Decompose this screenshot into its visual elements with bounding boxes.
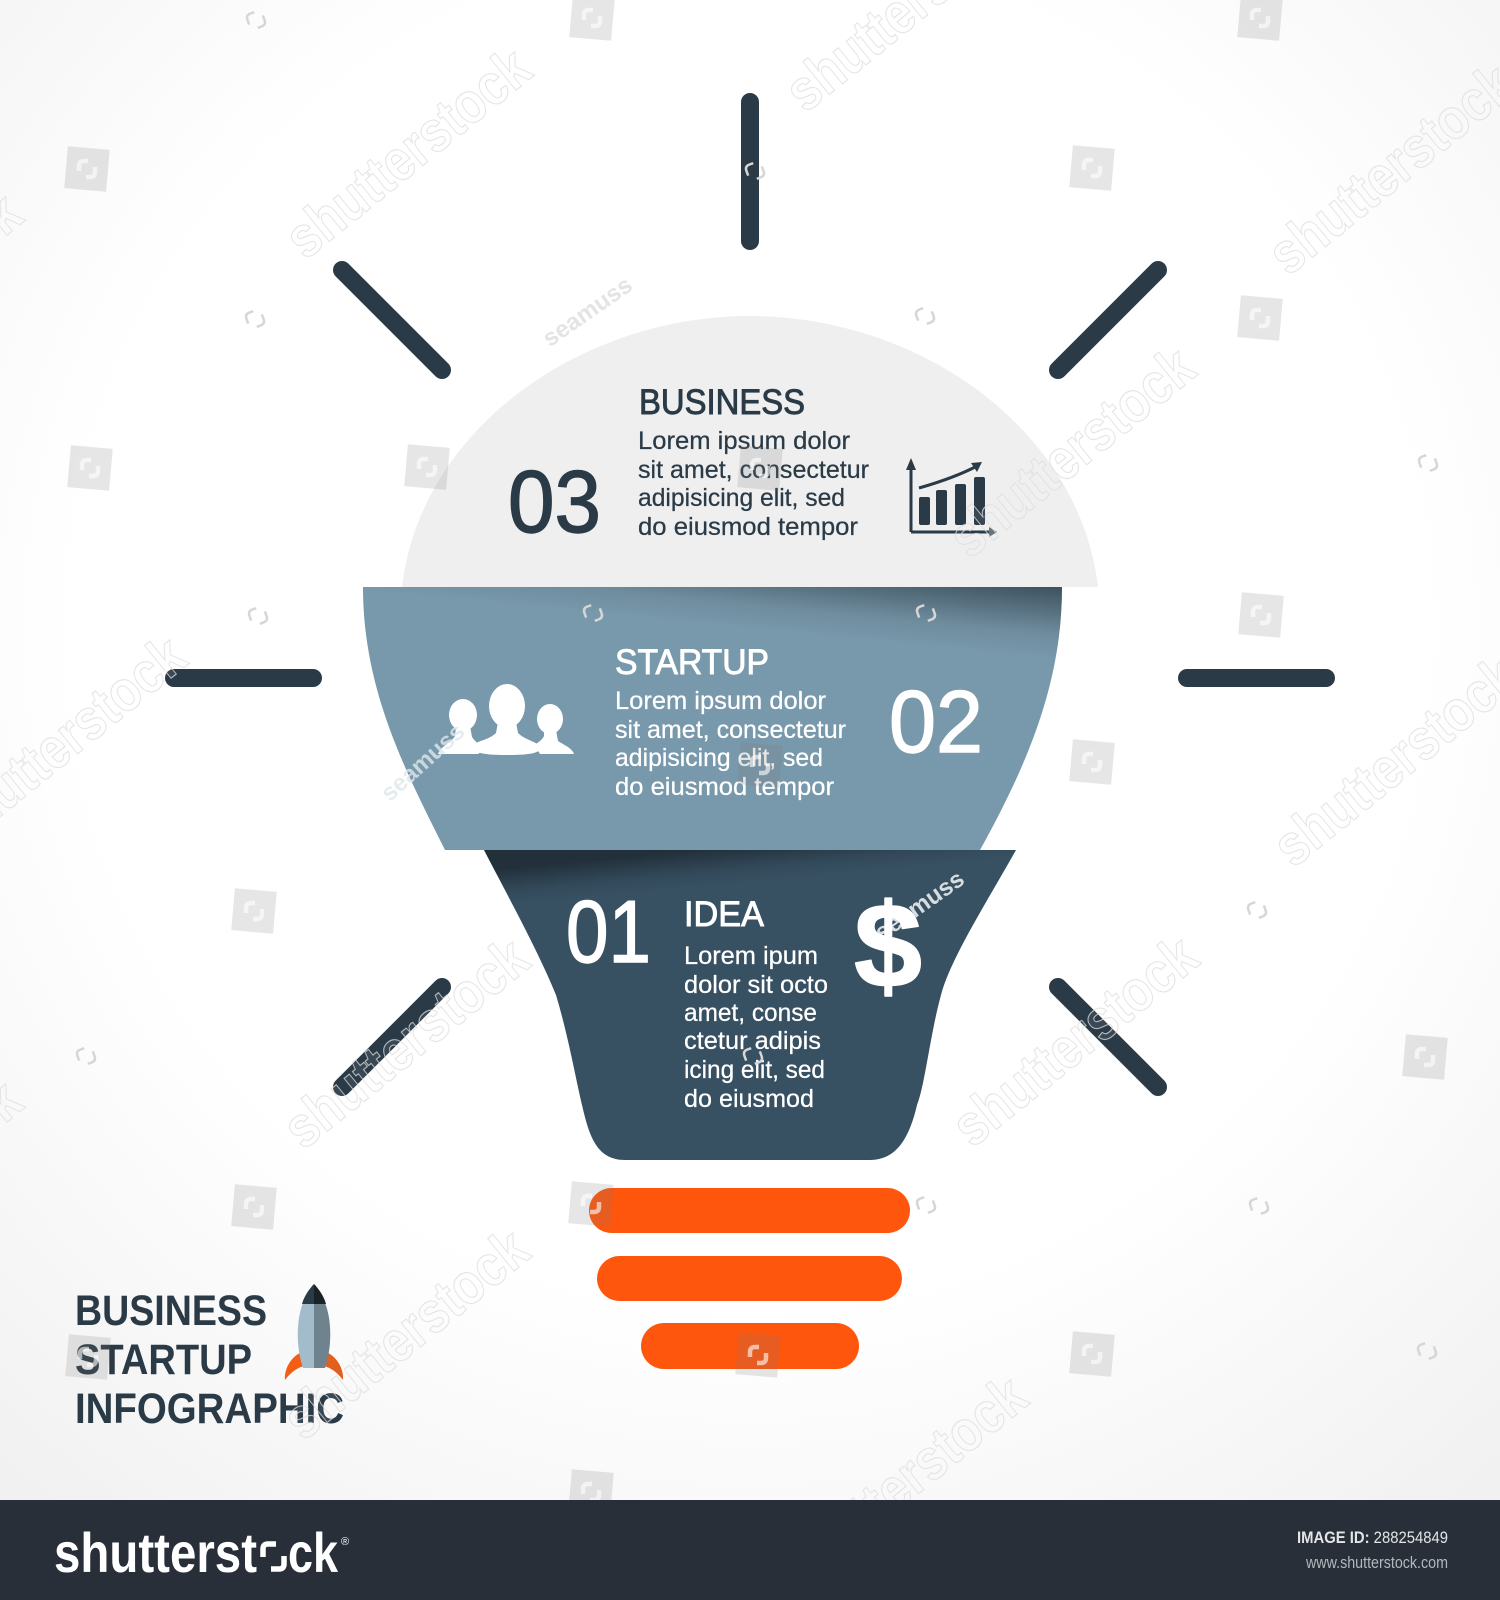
footer image id: IMAGE ID: 288254849	[1297, 1528, 1448, 1547]
text block: startup: adipisicing elit, sed	[615, 744, 823, 772]
light rays	[174, 102, 1326, 1087]
text block: startup	[615, 687, 846, 801]
text block: business: adipisicing elit, sed	[638, 484, 845, 512]
text block: idea	[684, 942, 828, 1113]
watermarks: shutterstock	[273, 34, 543, 271]
icon: dollar: $	[854, 879, 922, 1013]
watermarks: shutterstock	[271, 924, 541, 1161]
text block: startup: sit amet, consectetur	[615, 716, 846, 744]
panel: 03 business (bulb dome)	[402, 316, 1098, 587]
text block: idea: ctetur adipis	[684, 1027, 821, 1055]
heading: idea: IDEA	[684, 895, 765, 934]
number 03: 03	[508, 452, 601, 551]
watermarks: seamuss	[538, 271, 638, 352]
text block: idea: icing elit, sed	[684, 1056, 825, 1084]
watermarks: shutterstock	[940, 922, 1210, 1159]
watermarks: shutterstock	[937, 333, 1207, 570]
panel: 02 startup (bulb middle)	[363, 587, 1063, 850]
icon: people	[438, 684, 574, 755]
text block: startup: Lorem ipsum dolor	[615, 687, 826, 715]
text block: business: do eiusmod tempor	[638, 513, 858, 541]
watermarks: shutterstock	[769, 1362, 1039, 1599]
title: business startup infographic	[75, 1287, 344, 1433]
panel: 01 idea (bulb neck)	[484, 850, 1016, 1160]
text block: business	[638, 427, 869, 541]
footer url: www.shutterstock.com	[1305, 1553, 1448, 1572]
bulb socket	[589, 1188, 910, 1369]
icon: growth chart	[906, 458, 997, 537]
footer bar	[0, 1500, 1500, 1600]
fold shadow	[488, 587, 1062, 644]
footer logo: shutterst	[54, 1521, 257, 1584]
text block: business: Lorem ipsum dolor	[638, 427, 850, 455]
icon: rocket	[285, 1284, 343, 1380]
footer logo: ®	[341, 1536, 349, 1548]
watermarks: seamuss	[376, 718, 470, 807]
watermarks: seamuss	[870, 865, 970, 946]
fold shadow	[484, 850, 946, 892]
title: business startup infographic: INFOGRAPHIC	[75, 1385, 344, 1433]
heading: business: BUSINESS	[639, 383, 805, 422]
number 01: 01	[566, 882, 651, 981]
title: business startup infographic: BUSINESS	[75, 1287, 267, 1335]
title: business startup infographic: STARTUP	[75, 1336, 252, 1384]
footer logo: ck	[288, 1521, 339, 1584]
watermarks: shutterstock	[271, 1215, 541, 1452]
text block: idea: do eiusmod	[684, 1085, 814, 1113]
text block: idea: amet, conse	[684, 999, 817, 1027]
heading: startup: STARTUP	[615, 643, 769, 682]
number 02: 02	[889, 672, 983, 771]
text block: business: sit amet, consectetur	[638, 456, 869, 484]
text block: startup: do eiusmod tempor	[615, 773, 834, 801]
text block: idea: Lorem ipum	[684, 942, 818, 970]
text block: idea: dolor sit octo	[684, 971, 828, 999]
